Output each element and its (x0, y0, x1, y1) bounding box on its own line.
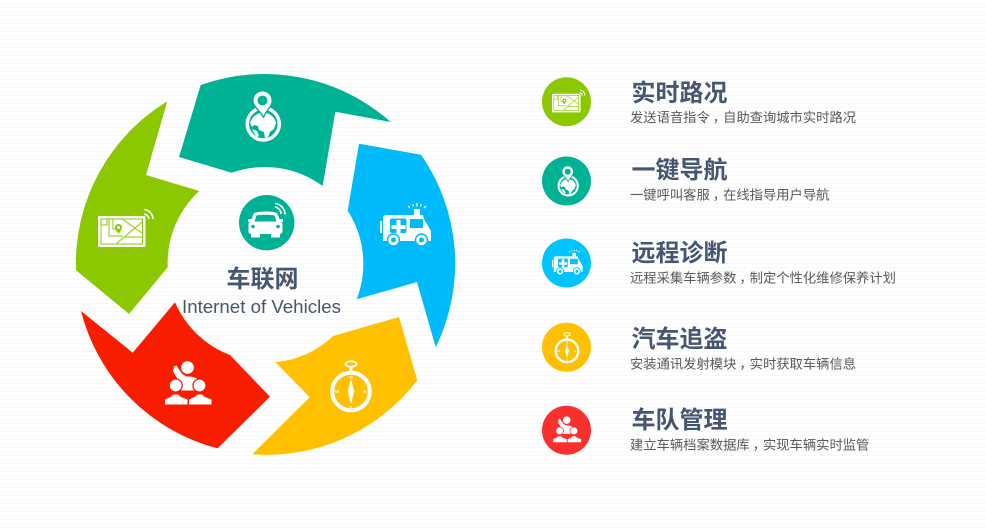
center subtitle: Internet of Vehicles (182, 296, 341, 317)
heading: 实时路况 (632, 80, 728, 107)
icon: people (165, 361, 212, 404)
icon: map (98, 210, 153, 247)
description: 发送语音指令，自助查询城市实时路况 (630, 109, 856, 125)
icon: connected car (239, 195, 294, 250)
icon badge: compass (542, 323, 591, 372)
list item: real-time traffic (542, 77, 856, 126)
segment: red fleet (81, 302, 270, 448)
icon: compass (332, 361, 370, 410)
heading: 车队管理 (632, 407, 728, 434)
description: 安装通讯发射模块，实时获取车辆信息 (630, 356, 856, 372)
segment: blue diagnostics (348, 144, 455, 347)
heading: 汽车追盗 (632, 326, 728, 353)
icon badge: people (542, 406, 591, 455)
description: 远程采集车辆参数，制定个性化维修保养计划 (630, 270, 896, 286)
list item: vehicle anti-theft tracking (542, 323, 856, 372)
description: 建立车辆档案数据库，实现车辆实时监管 (630, 436, 869, 452)
segment: teal navigation (179, 74, 391, 186)
segment: green traffic (76, 101, 199, 314)
list item: one-key navigation (542, 156, 829, 206)
description: 一键呼叫客服，在线指导用户导航 (630, 186, 829, 202)
icon badge: ambulance (542, 238, 591, 288)
heading: 远程诊断 (632, 240, 728, 267)
list item: fleet management (542, 406, 869, 455)
segment: yellow tracking (252, 317, 417, 455)
icon: globe and pin (247, 90, 279, 140)
center hub (182, 195, 341, 317)
ring diagram (76, 74, 455, 455)
list item: remote diagnostics (542, 238, 896, 288)
icon badge: globe (542, 156, 591, 206)
icon badge: map (542, 77, 591, 126)
heading: 一键导航 (632, 157, 728, 184)
center title: 车联网 (226, 266, 298, 293)
icon: ambulance (380, 203, 431, 246)
